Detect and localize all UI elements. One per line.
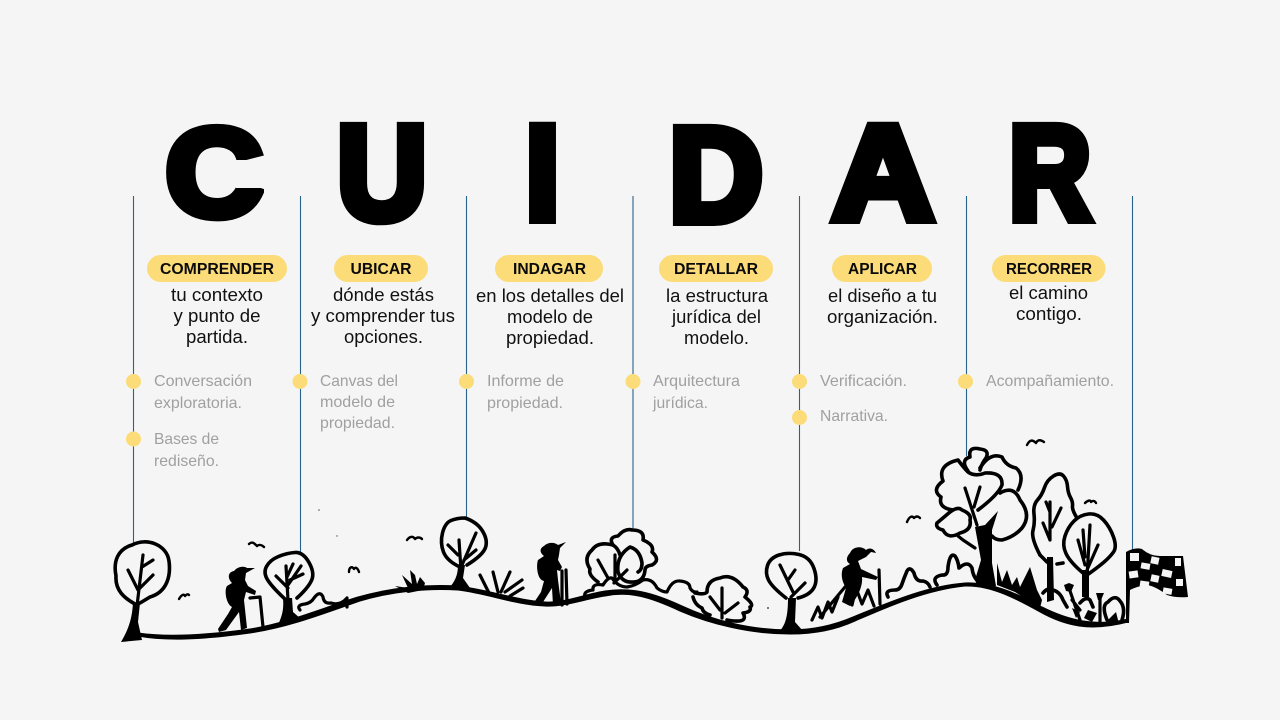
deliverable: acompañamiento: Acompañamiento. — [986, 373, 1114, 390]
description: ubicar — [311, 285, 455, 347]
deliverable: conversación exploratoria: exploratoria. — [154, 395, 242, 412]
deliverable: narrativa — [792, 408, 888, 425]
bush 3 — [693, 577, 752, 621]
description: recorrer — [1009, 283, 1088, 324]
badge: indagar — [495, 255, 603, 282]
description: comprender: partida. — [186, 327, 248, 347]
title: CUIDAR letters: C — [166, 104, 262, 242]
description: indagar: modelo de — [507, 307, 593, 327]
deliverable: bases de rediseño: rediseño. — [154, 453, 219, 470]
tree 1 — [115, 542, 169, 642]
deliverable: bases de rediseño: Bases de — [154, 431, 219, 448]
grass 1 — [395, 570, 425, 593]
panel: comprender — [126, 255, 287, 470]
badge: comprender: COMPRENDER — [160, 261, 274, 278]
description: indagar: propiedad. — [506, 328, 594, 348]
deliverable: arquitectura: jurídica. — [652, 395, 708, 412]
large tree — [936, 448, 1027, 587]
panel: indagar — [459, 255, 624, 412]
panel: ubicar — [292, 255, 455, 432]
title: CUIDAR letters: I — [525, 98, 560, 248]
description: indagar: en los detalles del — [476, 286, 624, 306]
deliverable: verificación: Verificación. — [820, 373, 907, 390]
title: CUIDAR letters: U — [337, 99, 427, 248]
deliverable: informe: propiedad. — [487, 395, 563, 412]
tree 3 — [441, 518, 486, 589]
description: comprender: y punto de — [174, 306, 260, 326]
bush 5 — [935, 555, 980, 585]
description: detallar: modelo. — [684, 328, 749, 348]
description: ubicar: y comprender tus — [311, 306, 455, 326]
badge: detallar — [659, 255, 773, 282]
birds — [179, 440, 1096, 599]
column timeline lines — [134, 196, 1132, 552]
grass 2 — [480, 572, 523, 596]
round tree — [1064, 514, 1115, 597]
badge: ubicar — [334, 255, 428, 282]
description: ubicar: dónde estás — [333, 285, 434, 305]
panel: aplicar — [792, 255, 938, 425]
description: detallar: jurídica del — [671, 307, 761, 327]
badge: aplicar: APLICAR — [848, 261, 917, 278]
description: aplicar: organización. — [827, 307, 938, 327]
deliverable: bases de rediseño — [126, 431, 219, 470]
description: detallar: la estructura — [666, 286, 769, 306]
title: CUIDAR letters — [166, 122, 1096, 226]
hiker 3 — [812, 547, 880, 620]
title: CUIDAR letters: D — [669, 100, 763, 249]
badge: recorrer — [992, 255, 1106, 282]
description: ubicar: opciones. — [344, 327, 423, 347]
description: comprender — [171, 285, 263, 347]
deliverable: arquitectura: Arquitectura — [653, 373, 740, 390]
badge: ubicar: UBICAR — [350, 261, 412, 278]
description: aplicar — [827, 286, 938, 327]
hiker 1 — [218, 567, 263, 632]
description: comprender: tu contexto — [171, 285, 263, 305]
grass beside large tree — [997, 563, 1042, 608]
description: recorrer: el camino — [1009, 283, 1088, 303]
bush 1 — [299, 594, 347, 610]
description: recorrer: contigo. — [1016, 304, 1082, 324]
illustration: landscape path with hikers — [115, 440, 1188, 642]
description: indagar — [476, 286, 624, 348]
bush 4 — [887, 569, 930, 597]
deliverable: conversación exploratoria: Conversación — [154, 373, 252, 390]
ground line — [138, 583, 1128, 639]
badge: detallar: DETALLAR — [674, 261, 758, 278]
description: detallar — [666, 286, 769, 348]
badge: aplicar — [832, 255, 932, 282]
deliverable: canvas: modelo de — [320, 394, 395, 411]
poplar tree — [1033, 474, 1077, 602]
panel: detallar — [626, 255, 773, 412]
bush 2 — [585, 530, 697, 597]
deliverable: canvas — [292, 373, 398, 432]
checkered flag — [1126, 548, 1188, 623]
hiker 2 — [533, 542, 567, 605]
title: CUIDAR letters: R — [1009, 98, 1091, 248]
badge: recorrer: RECORRER — [1006, 261, 1092, 278]
deliverable: arquitectura — [626, 373, 740, 412]
flowers and plants — [1043, 583, 1124, 624]
small specks — [318, 509, 769, 609]
deliverable: narrativa: Narrativa. — [820, 408, 888, 425]
tree 2 — [265, 552, 313, 625]
description: aplicar: el diseño a tu — [828, 286, 937, 306]
deliverable: canvas: propiedad. — [320, 415, 395, 432]
panel: recorrer — [958, 255, 1114, 390]
deliverable: canvas: Canvas del — [320, 373, 398, 390]
badge: comprender — [147, 255, 287, 282]
tree 4 — [766, 553, 816, 633]
deliverable: informe — [459, 373, 564, 412]
deliverable: informe: Informe de — [487, 373, 564, 390]
deliverable: conversación exploratoria — [126, 373, 252, 412]
badge: indagar: INDAGAR — [513, 261, 586, 278]
title: CUIDAR letters: A — [832, 99, 934, 248]
